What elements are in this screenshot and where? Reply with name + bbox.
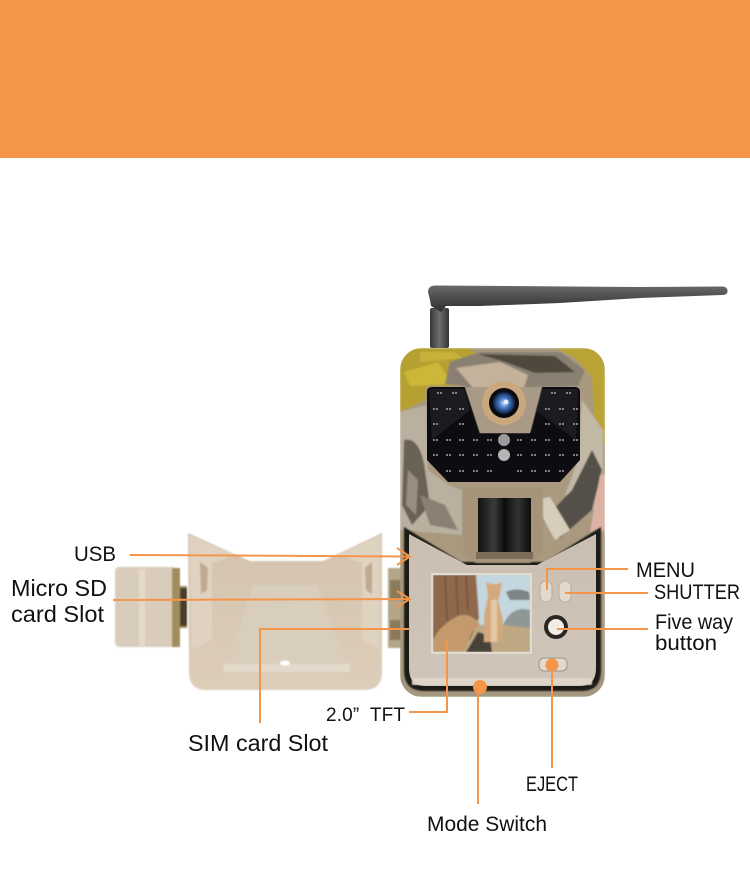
camera door bbox=[115, 533, 405, 690]
callout dots bbox=[473, 658, 558, 694]
orange header band bbox=[0, 0, 750, 158]
LCD screen bbox=[431, 573, 532, 654]
lioness standing bbox=[484, 582, 503, 642]
line: five way bbox=[557, 628, 648, 630]
icon: camera lens bbox=[482, 381, 526, 425]
left door flap bbox=[115, 567, 174, 647]
arrow: Micro SD bbox=[113, 591, 410, 607]
PIR sensor bbox=[463, 488, 543, 563]
label: Five way button bbox=[655, 611, 733, 655]
camo shell bbox=[400, 348, 605, 697]
distant acacia bbox=[506, 590, 530, 600]
buttons bbox=[539, 581, 571, 671]
line: eject bbox=[551, 664, 553, 768]
icon: antenna bbox=[428, 286, 728, 348]
beige front panel bbox=[409, 534, 596, 686]
label: Micro SD card Slot bbox=[11, 575, 107, 627]
label: MENU: MENU bbox=[636, 559, 695, 582]
inner black bezel bbox=[404, 527, 601, 691]
line: menu bbox=[547, 569, 628, 590]
label: TFT: 2.0” TFT bbox=[326, 705, 405, 726]
line: TFT bbox=[409, 640, 447, 712]
camera body bbox=[400, 348, 605, 697]
right hinge bbox=[388, 568, 405, 648]
label: Five way button: Five way bbox=[655, 611, 733, 634]
door hinge bbox=[172, 568, 187, 647]
label: EJECT: EJECT bbox=[526, 773, 578, 796]
lens notch bbox=[465, 387, 542, 433]
IR LED panel bbox=[427, 387, 580, 482]
label: Five way button: button bbox=[655, 632, 717, 655]
label: Micro SD card Slot: card Slot bbox=[11, 601, 105, 627]
lioness lying bbox=[433, 615, 480, 652]
callout lines bbox=[113, 548, 648, 804]
line: SIM card slot bbox=[260, 629, 410, 723]
door tray bbox=[188, 533, 382, 690]
label: USB: USB bbox=[74, 543, 116, 566]
label: Mode Switch: Mode Switch bbox=[427, 813, 547, 836]
arrow: USB bbox=[130, 548, 410, 565]
line: shutter bbox=[565, 592, 648, 594]
line: mode switch bbox=[477, 687, 479, 804]
label: Micro SD card Slot: Micro SD bbox=[11, 575, 107, 601]
label: SIM card Slot: SIM card Slot bbox=[188, 730, 329, 756]
